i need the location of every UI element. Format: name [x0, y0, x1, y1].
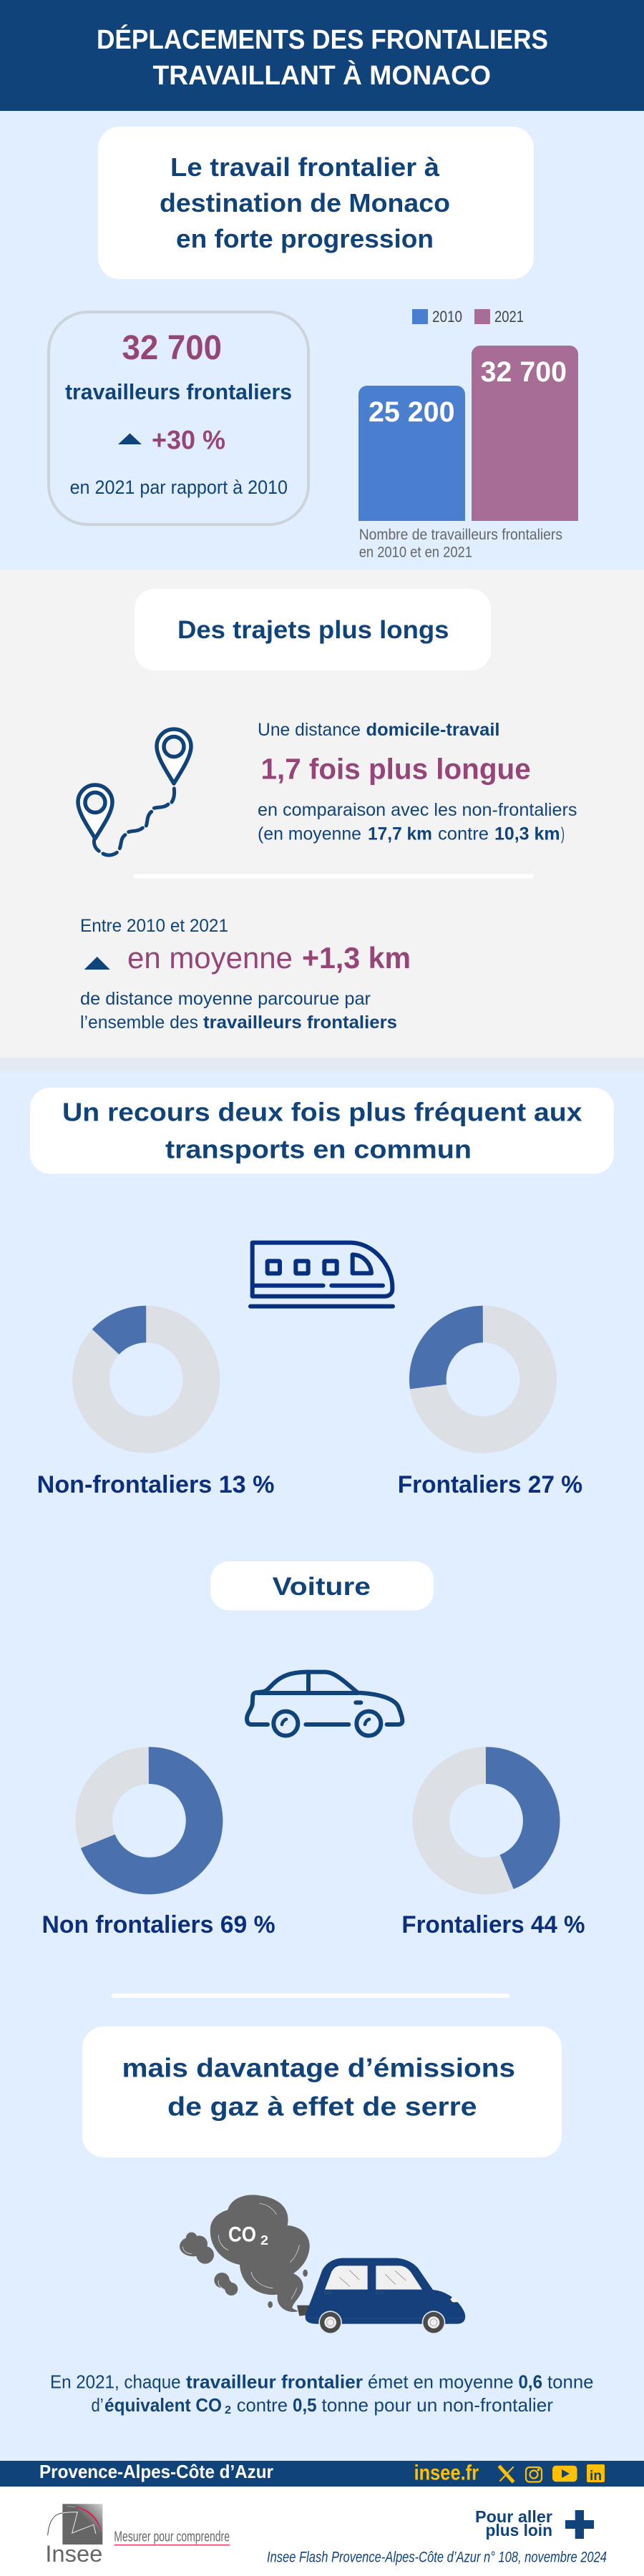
- donut chart: frontaliers 44 %: [431, 1765, 542, 1876]
- text block: distance domicile-travail: [258, 720, 577, 844]
- label: frontaliers 27 %: Frontaliers 27 %: [398, 1471, 582, 1498]
- heading: voiture: Voiture: [273, 1572, 371, 1601]
- logo: Insee: Mesurer pour comprendre: [114, 2529, 230, 2545]
- heading: transports en commun: Un recours deux fois plus fréquent aux: [62, 1098, 582, 1127]
- heading: des trajets plus longs: [135, 589, 491, 670]
- heading: travail frontalier: Le travail frontalier à: [170, 152, 440, 182]
- link: pour aller plus loin: plus loin: [485, 2521, 552, 2540]
- stat card: 32 700 frontaliers: +30 %: [152, 425, 225, 455]
- link: pour aller plus loin: Pour aller: [475, 2507, 552, 2526]
- footer band: insee.fr: [414, 2462, 479, 2485]
- donut chart: non frontaliers 69 %: [94, 1765, 205, 1876]
- text block: distance domicile-travail: en comparaison avec les non-frontaliers: [258, 800, 577, 820]
- icon: car outline: [247, 1672, 402, 1736]
- bar chart: frontaliers 2010 et 2021: 2010: [432, 308, 462, 326]
- text block: distance domicile-travail: contre: [438, 824, 489, 844]
- text block: distance domicile-travail: 10,3 km: [494, 824, 560, 844]
- logo: Insee: [45, 2504, 230, 2567]
- bar chart: frontaliers 2010 et 2021: en 2010 et en 2021: [359, 545, 472, 561]
- icon: YouTube: [552, 2466, 577, 2482]
- text block: CO2 per worker: d’: [92, 2394, 104, 2416]
- heading: transports en commun: transports en commun: [165, 1135, 472, 1163]
- stat card: 32 700 frontaliers: travailleurs frontaliers: [65, 379, 292, 404]
- panel: transports en commun: [30, 1088, 614, 1498]
- icon: X: [500, 2467, 513, 2481]
- panel: forte progression: [49, 127, 578, 561]
- text block: CO2 per worker: contre: [237, 2394, 288, 2416]
- bar chart: frontaliers 2010 et 2021: Nombre de travailleurs frontaliers: [359, 527, 562, 543]
- title banner: DÉPLACEMENTS DES FRONTALIERS: [97, 24, 548, 55]
- text block: CO2 per worker: travailleur frontalier: [186, 2371, 363, 2393]
- icon: train: [250, 1243, 393, 1307]
- text block: évolution 2010-2021: travailleurs frontaliers: [203, 1013, 397, 1033]
- icon: LinkedIn: [587, 2464, 605, 2484]
- logo: Insee: Insee: [45, 2541, 102, 2567]
- text block: CO2 per worker: 0,5: [293, 2394, 317, 2416]
- text block: CO2 per worker: [50, 2371, 594, 2416]
- title banner: [0, 0, 644, 111]
- panel: voiture: [42, 1561, 585, 1938]
- text block: CO2 per worker: tonne: [547, 2371, 594, 2393]
- heading: travail frontalier: destination de Monaco: [160, 188, 450, 218]
- text block: distance domicile-travail: ): [561, 824, 565, 844]
- text block: distance domicile-travail: 17,7 km: [368, 824, 432, 844]
- stat card: 32 700 frontaliers: en 2021 par rapport à 2010: [70, 477, 288, 498]
- link: pour aller plus loin: [475, 2507, 594, 2540]
- bar chart: frontaliers 2010 et 2021: 25 200: [369, 396, 455, 428]
- label: frontaliers 44 %: Frontaliers 44 %: [401, 1911, 585, 1938]
- text block: distance domicile-travail: (en moyenne: [258, 824, 361, 844]
- text block: évolution 2010-2021: +1,3 km: [302, 941, 411, 975]
- footer band: [0, 2461, 644, 2487]
- stat card: 32 700 frontaliers: 32 700: [122, 329, 222, 367]
- panel: trajets plus longs: [0, 570, 644, 1071]
- illustration: car emitting CO2: 2: [260, 2233, 268, 2248]
- footer band: Provence-Alpes-Côte d’Azur: [39, 2461, 273, 2482]
- text block: distance domicile-travail: Une distance: [258, 720, 361, 740]
- icon: Instagram: [526, 2467, 542, 2482]
- heading: travail frontalier: [98, 127, 534, 279]
- text block: CO2 per worker: En 2021, chaque: [50, 2371, 181, 2393]
- text block: CO2 per worker: tonne pour un non-frontalier: [322, 2394, 553, 2416]
- text block: CO2 per worker: émet en moyenne: [368, 2371, 514, 2393]
- text block: CO2 per worker: 2: [225, 2404, 231, 2416]
- stat card: 32 700 frontaliers: [49, 312, 308, 525]
- title banner: TRAVAILLANT À MONACO: [153, 59, 491, 91]
- label: non frontaliers 69 %: Non frontaliers 69 %: [42, 1911, 275, 1938]
- text block: évolution 2010-2021: de distance moyenne parcourue par: [80, 989, 371, 1009]
- text block: distance domicile-travail: 1,7 fois plus longue: [260, 752, 531, 785]
- text block: évolution 2010-2021: l’ensemble des: [80, 1013, 198, 1033]
- text block: évolution 2010-2021: Entre 2010 et 2021: [80, 916, 228, 936]
- label: non-frontaliers 13 %: Non-frontaliers 13 %: [37, 1471, 274, 1498]
- heading: émissions: mais davantage d’émissions: [122, 2053, 515, 2083]
- illustration: car emitting CO2: CO: [228, 2223, 256, 2247]
- text block: distance domicile-travail: domicile-travail: [366, 720, 499, 740]
- icon: map pins with dashed route: [78, 729, 191, 855]
- donut chart: frontaliers 27 %: [421, 1317, 545, 1441]
- illustration: car emitting CO2: [180, 2195, 465, 2334]
- heading: voiture: [210, 1561, 434, 1610]
- text block: évolution 2010-2021: [80, 916, 411, 1033]
- bar chart: frontaliers 2010 et 2021: 2021: [494, 308, 524, 326]
- panel: émissions de gaz à effet de serre: [50, 2026, 594, 2416]
- text block: CO2 per worker: 0,6: [518, 2371, 542, 2393]
- bar chart: frontaliers 2010 et 2021: 32 700: [481, 356, 567, 388]
- text block: évolution 2010-2021: en moyenne: [127, 941, 293, 975]
- heading: transports en commun: [30, 1088, 614, 1174]
- heading: émissions: [82, 2026, 562, 2157]
- donut chart: non-frontaliers 13 %: [68, 1302, 224, 1458]
- bar chart: frontaliers 2010 et 2021: [358, 308, 578, 561]
- heading: émissions: de gaz à effet de serre: [167, 2091, 477, 2121]
- heading: travail frontalier: en forte progression: [176, 224, 434, 253]
- heading: des trajets plus longs: Des trajets plus longs: [177, 615, 449, 644]
- icon: LinkedIn: in: [590, 2469, 602, 2484]
- footer: white area: [0, 2487, 644, 2576]
- text block: CO2 per worker: équivalent CO: [104, 2394, 222, 2416]
